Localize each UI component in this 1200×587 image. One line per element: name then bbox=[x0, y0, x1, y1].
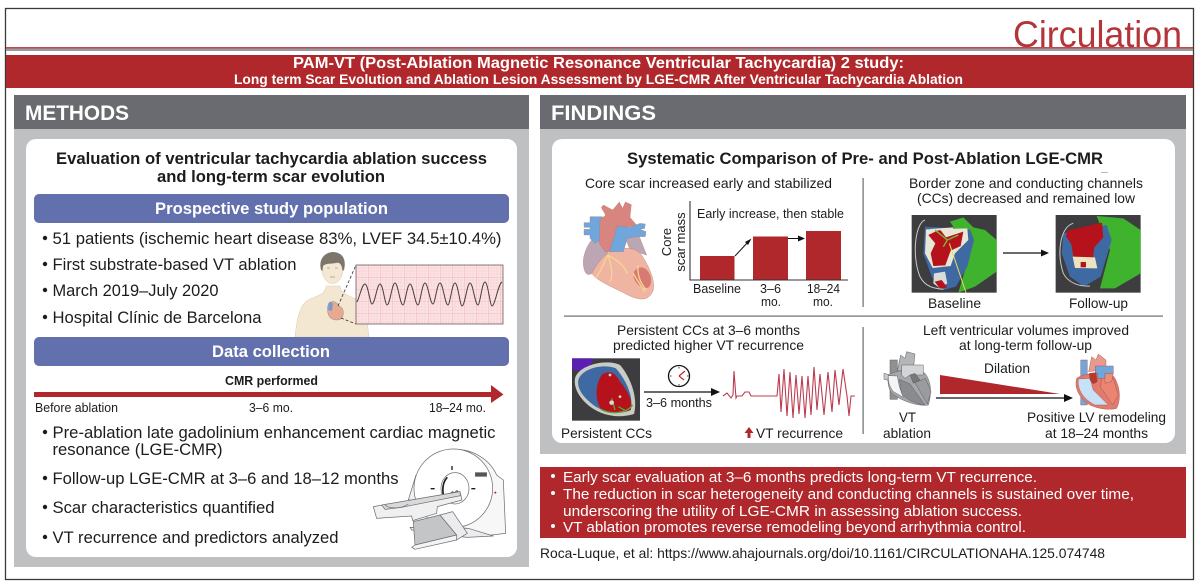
citation: Roca-Luque, et al: https://www.ahajournals.org/doi/10.1161/CIRCULATIONAHA.125.074748 bbox=[540, 545, 1105, 561]
arrow: 3–6 months bbox=[644, 388, 720, 410]
finding: border zone and conducting channels: Follow-up bbox=[1069, 295, 1128, 311]
data collection bullets: VT recurrence and predictors analyzed bbox=[52, 528, 338, 547]
findings white card bbox=[552, 139, 1175, 443]
CMR map: persistent CCs bbox=[572, 358, 640, 421]
timeline arrow: CMR performed bbox=[34, 374, 504, 415]
section bar: data collection: Data collection bbox=[212, 342, 330, 361]
finding: persistent CCs: Persistent CCs bbox=[561, 425, 652, 441]
methods card title: and long-term scar evolution bbox=[157, 168, 385, 186]
title band: Long term Scar Evolution and Ablation Lesion Assessment by LGE-CMR After Ventricular Tachycardia Ablation bbox=[234, 71, 963, 87]
icon: patient with heart bbox=[295, 252, 369, 337]
data collection bullets: Follow-up LGE-CMR at 3–6 and 18–12 months bbox=[52, 469, 398, 488]
key takeaways box: VT ablation promotes reverse remodeling beyond arrhythmia control. bbox=[563, 519, 1026, 536]
key takeaways box bbox=[540, 467, 1186, 538]
icon: heart with scar bbox=[583, 202, 654, 299]
icon: colored heart after bbox=[1076, 354, 1119, 409]
finding: persistent CCs: predicted higher VT recurrence bbox=[613, 337, 804, 353]
study population bullets: Hospital Clínic de Barcelona bbox=[52, 308, 262, 327]
finding: left ventricular volumes: Left ventricular volumes improved bbox=[923, 322, 1129, 338]
icon: gray heart before bbox=[884, 352, 931, 405]
methods heading bbox=[14, 95, 529, 129]
finding: border zone and conducting channels: (CCs) decreased and remained low bbox=[917, 190, 1136, 206]
bar chart: core scar mass: Early increase, then stable bbox=[697, 206, 844, 221]
dilation wedge and arrow bbox=[936, 360, 1073, 402]
CMR map: follow-up bbox=[1056, 215, 1141, 293]
section bar: data collection bbox=[34, 337, 509, 366]
timeline arrow: CMR performed: 3–6 mo. bbox=[249, 400, 293, 415]
data collection bullets: resonance (LGE-CMR) bbox=[52, 440, 222, 459]
finding: core scar: Core scar increased early and stabilized bbox=[585, 175, 832, 191]
findings heading bbox=[540, 95, 1186, 129]
timeline arrow: CMR performed: CMR performed bbox=[225, 374, 318, 388]
finding: core scar bbox=[583, 175, 848, 309]
study population bullets: March 2019–July 2020 bbox=[52, 281, 218, 300]
arrow: 3–6 months: 3–6 months bbox=[646, 395, 712, 410]
study population bullets: First substrate-based VT ablation bbox=[52, 255, 296, 274]
arrow: baseline to follow-up bbox=[1003, 250, 1049, 256]
icon: clock bbox=[668, 366, 690, 386]
finding: left ventricular volumes: ablation bbox=[883, 425, 931, 441]
findings heading: FINDINGS bbox=[551, 102, 656, 125]
journal header: Circulation: Circulation bbox=[1013, 14, 1182, 55]
data collection bullets: Pre-ablation late gadolinium enhancement cardiac magnetic bbox=[52, 423, 496, 442]
findings card title: Systematic Comparison of Pre- and Post-Ablation LGE-CMR bbox=[627, 150, 1103, 168]
methods card title: Evaluation of ventricular tachycardia ablation success bbox=[56, 150, 487, 168]
finding: persistent CCs bbox=[561, 322, 855, 441]
bar chart: core scar mass: Core bbox=[659, 228, 674, 256]
bar chart: core scar mass: scar mass bbox=[673, 212, 688, 272]
bar chart: core scar mass: mo. bbox=[813, 294, 833, 309]
methods white card bbox=[26, 139, 517, 557]
finding: left ventricular volumes: Positive LV remodeling bbox=[1027, 409, 1166, 425]
icon: CMR scanner bbox=[373, 449, 506, 549]
panel: methods bbox=[14, 95, 529, 567]
key takeaways box: The reduction in scar heterogeneity and conducting channels is sustained over time, bbox=[563, 486, 1134, 503]
ECG strip: tachycardia bbox=[356, 265, 503, 324]
dilation wedge and arrow: Dilation bbox=[984, 360, 1030, 376]
panel: findings bbox=[540, 95, 1186, 454]
bar chart: core scar mass: Baseline bbox=[693, 281, 741, 296]
bar chart: core scar mass: mo. bbox=[761, 294, 781, 309]
timeline arrow: CMR performed: Before ablation bbox=[35, 400, 118, 415]
section bar: prospective study population bbox=[34, 194, 509, 223]
key takeaways box: underscoring the utility of LGE-CMR in assessing ablation success. bbox=[563, 503, 1022, 520]
study population bullets bbox=[43, 229, 502, 327]
finding: left ventricular volumes: at long-term follow-up bbox=[959, 337, 1092, 353]
chart: VT recurrence ECG trace bbox=[723, 367, 855, 418]
data collection bullets: Scar characteristics quantified bbox=[52, 498, 274, 517]
key takeaways box: Early scar evaluation at 3–6 months predicts long-term VT recurrence. bbox=[563, 469, 1037, 486]
title band bbox=[6, 55, 1193, 88]
timeline arrow: CMR performed: 18–24 mo. bbox=[429, 400, 486, 415]
finding: border zone and conducting channels bbox=[909, 175, 1143, 311]
data collection bullets bbox=[43, 423, 496, 547]
icon: small heart bbox=[328, 302, 343, 320]
bar chart: core scar mass: 18–24 bbox=[807, 281, 840, 296]
bar chart: core scar mass bbox=[659, 201, 848, 309]
study population bullets: 51 patients (ischemic heart disease 83%, LVEF 34.5±10.4%) bbox=[52, 229, 502, 248]
finding: left ventricular volumes: at 18–24 months bbox=[1045, 425, 1148, 441]
methods card title bbox=[56, 150, 487, 186]
finding: border zone and conducting channels: Border zone and conducting channels bbox=[909, 175, 1143, 191]
finding: left ventricular volumes: VT bbox=[899, 409, 916, 425]
finding: persistent CCs: Persistent CCs at 3–6 months bbox=[617, 322, 800, 338]
bar chart: core scar mass: 3–6 bbox=[760, 281, 781, 296]
methods heading: METHODS bbox=[25, 102, 129, 125]
title band: PAM-VT (Post-Ablation Magnetic Resonance Ventricular Tachycardia) 2 study: bbox=[293, 55, 904, 72]
finding: border zone and conducting channels: Baseline bbox=[928, 295, 981, 311]
CMR map: baseline bbox=[912, 215, 997, 293]
icon: up arrow, VT recurrence: VT recurrence bbox=[756, 425, 843, 441]
finding: left ventricular volumes bbox=[883, 322, 1166, 441]
section bar: prospective study population: Prospective study population bbox=[155, 199, 388, 218]
